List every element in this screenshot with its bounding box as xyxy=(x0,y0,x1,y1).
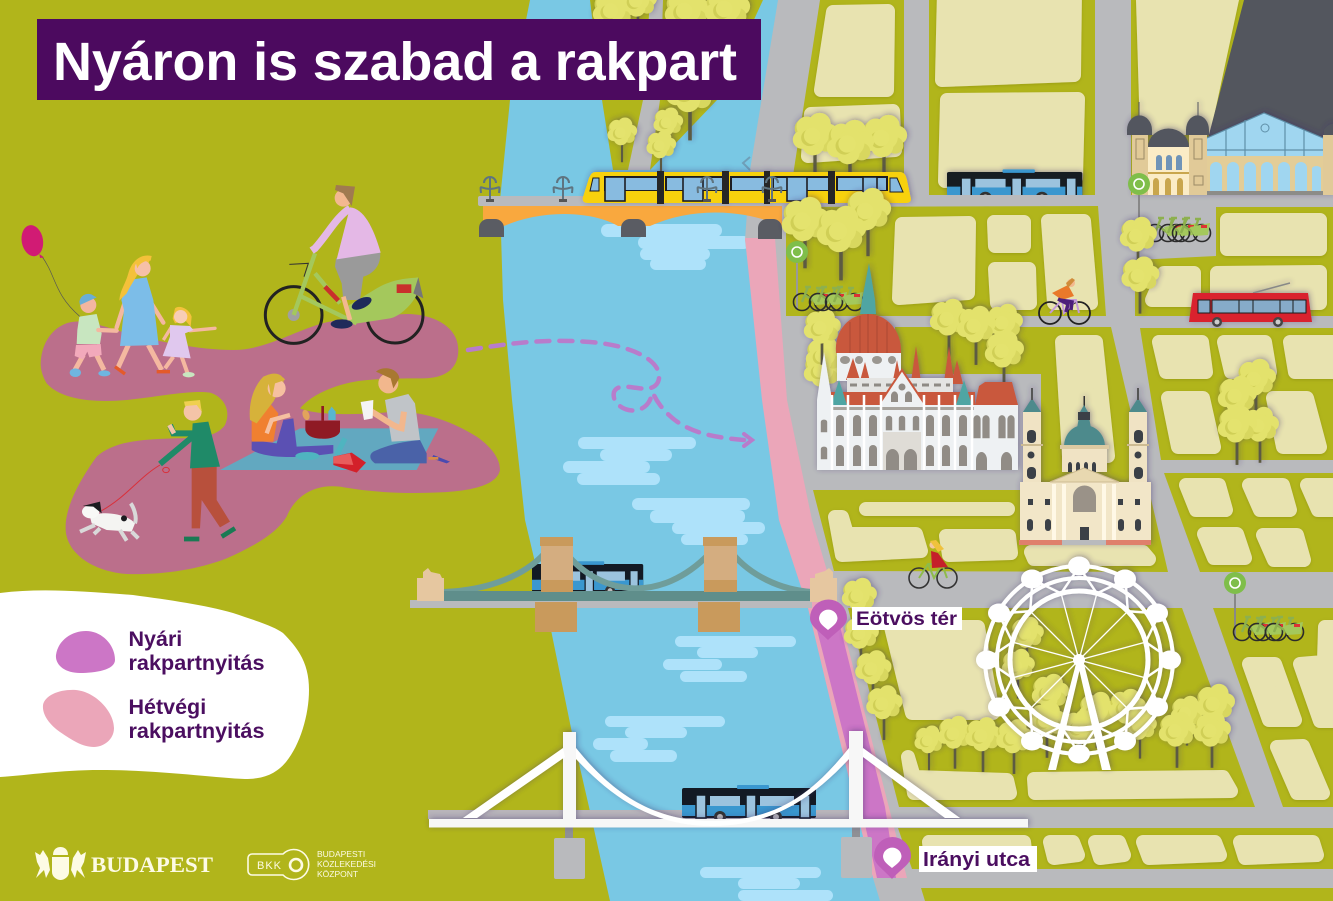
small cyclist with orange top xyxy=(1039,278,1090,324)
legend panel xyxy=(0,590,309,779)
dog walker and dog xyxy=(80,400,235,541)
water ripples xyxy=(563,224,833,901)
stone towers xyxy=(540,537,737,592)
station towers and centre xyxy=(1127,102,1333,195)
central arch xyxy=(1073,486,1096,512)
church body xyxy=(1020,482,1151,540)
bridge arches xyxy=(483,206,782,226)
title banner: Nyáron is szabad a rakpart xyxy=(53,32,737,92)
support legs xyxy=(1048,660,1111,770)
pilasters xyxy=(832,395,972,470)
lattice xyxy=(986,567,1172,753)
legend background xyxy=(0,590,309,779)
centre gable xyxy=(880,370,924,412)
main wall xyxy=(817,405,1018,470)
bridge piers xyxy=(479,219,782,239)
tier windows xyxy=(840,356,896,364)
right wing roof xyxy=(975,382,1018,405)
columns xyxy=(1054,484,1114,540)
key shape xyxy=(248,850,309,880)
picnic basket and food xyxy=(301,406,340,439)
white structure xyxy=(429,731,1028,828)
chevron marker on the embankment xyxy=(743,157,750,170)
Parliament building xyxy=(817,263,1018,470)
mother xyxy=(115,255,170,374)
gable windows xyxy=(891,384,912,402)
roof gallery xyxy=(847,378,953,393)
red book xyxy=(333,453,366,473)
panel: river Danube xyxy=(500,0,890,901)
legend label: weekend: rakpartnyitás xyxy=(128,719,265,743)
St Stephen's Basilica xyxy=(1019,388,1151,545)
cyclist with bike xyxy=(265,185,423,343)
label: Eötvös tér: Eötvös tér xyxy=(856,609,958,630)
pin marker xyxy=(874,837,911,879)
Ferris wheel xyxy=(976,556,1181,770)
side windows xyxy=(1027,499,1141,531)
bikes: Nyugati rack xyxy=(1146,218,1210,242)
station marker: Parliament xyxy=(786,241,808,310)
legend swatch: summer xyxy=(56,631,115,673)
legend swatch: weekend xyxy=(43,690,114,747)
trees behind buildings xyxy=(593,0,1279,465)
lion plinths xyxy=(417,568,837,602)
trolley poles xyxy=(1253,283,1290,293)
steps xyxy=(1062,540,1106,545)
teal roof turrets xyxy=(831,380,972,405)
station marker: Nyugati xyxy=(1128,173,1150,245)
Budapest logo xyxy=(35,847,213,880)
dark railway station yard xyxy=(1205,0,1333,150)
title banner xyxy=(37,19,761,100)
trolley body xyxy=(1189,293,1312,322)
blue bus on Bajcsy street xyxy=(947,169,1082,202)
BKK logo xyxy=(248,849,376,880)
pin: Eötvös tér xyxy=(810,600,847,640)
pink weekend embankment stretch xyxy=(745,238,907,878)
BKK full name: KÖZLEKEDÉSI xyxy=(317,859,376,869)
picnicking man xyxy=(361,368,450,463)
pin: Irányi utca xyxy=(874,837,911,879)
legend label: summer: Nyári xyxy=(128,627,182,651)
rims xyxy=(985,566,1173,754)
spire xyxy=(860,263,876,314)
label: Irányi utca: Irányi utca xyxy=(923,849,1031,871)
arrow head xyxy=(744,434,752,446)
dome tier xyxy=(837,353,901,381)
trees along the ring road xyxy=(1120,217,1159,314)
tram joints xyxy=(657,171,835,204)
trees near the tram xyxy=(782,188,891,280)
stone piers xyxy=(535,602,740,632)
red pinnacles xyxy=(846,346,963,385)
bridge deck xyxy=(478,196,793,206)
key ring xyxy=(290,859,302,871)
bus on bridge xyxy=(682,785,816,823)
pin marker xyxy=(810,600,847,640)
railway station building xyxy=(1127,102,1333,195)
bridge lamps xyxy=(481,177,572,202)
trees along the quay xyxy=(842,578,902,740)
arched windows xyxy=(821,415,1015,466)
girl xyxy=(163,307,215,377)
BKK full name: KÖZPONT xyxy=(317,869,358,879)
Chain bridge xyxy=(410,537,837,632)
left spire xyxy=(817,352,832,470)
pier stems xyxy=(565,827,860,838)
left tower xyxy=(1021,388,1043,484)
boy xyxy=(70,294,117,377)
pediment xyxy=(1050,468,1119,482)
bus behind bridge xyxy=(532,561,643,597)
BKK full name: BUDAPESTI xyxy=(317,849,365,859)
Margit bridge xyxy=(478,177,793,239)
legend label: summer: rakpartnyitás xyxy=(128,651,265,675)
hub xyxy=(1073,654,1085,666)
lower deck xyxy=(410,600,812,608)
bridge lamps in front of tram xyxy=(698,177,781,202)
legend label: weekend: Hétvégi xyxy=(128,695,206,719)
gable outline xyxy=(880,370,924,403)
pink base xyxy=(1019,540,1151,545)
door xyxy=(1080,527,1089,540)
yellow tram xyxy=(583,171,911,204)
concrete piers xyxy=(554,837,872,879)
olive city blocks xyxy=(786,0,1333,901)
dome xyxy=(836,314,901,353)
trolley wheels xyxy=(1212,317,1283,327)
portal xyxy=(883,432,921,470)
purple summer embankment stretch xyxy=(812,610,896,878)
illustrated people xyxy=(19,185,450,541)
picnic blanket xyxy=(220,428,438,470)
right tower xyxy=(1127,388,1149,484)
small cyclist in red dress xyxy=(909,540,957,588)
road cover below bus xyxy=(930,195,1094,206)
BKK letters: BKK xyxy=(257,860,282,872)
cream building plots xyxy=(808,0,1333,858)
dome ribs xyxy=(850,314,887,353)
red main roof xyxy=(831,392,975,405)
city crest xyxy=(35,847,86,880)
deck girder xyxy=(444,591,812,601)
park trees inside the wheel xyxy=(914,617,1235,774)
bikes: Parliament rack xyxy=(794,287,864,310)
city name: BUDAPEST xyxy=(91,852,213,877)
balloon with string xyxy=(19,223,96,345)
cabins xyxy=(976,556,1181,764)
suspension chains xyxy=(444,553,812,592)
bike stations xyxy=(786,173,1304,640)
red trolleybus xyxy=(1189,283,1312,327)
bikes: Oktogon rack xyxy=(1234,617,1304,640)
pin hole xyxy=(883,848,902,868)
tram body xyxy=(583,172,911,203)
trolley windows xyxy=(1198,300,1306,313)
glass hall xyxy=(1207,113,1323,195)
tram windows xyxy=(590,176,903,201)
Elisabeth bridge xyxy=(428,731,1028,879)
bridge roadway xyxy=(428,810,860,819)
portal doors xyxy=(886,449,1012,470)
spokes xyxy=(1012,593,1146,727)
mauve recreation blob xyxy=(41,314,500,574)
island with road xyxy=(590,0,763,170)
grey cornice xyxy=(831,407,974,410)
station marker: Oktogon xyxy=(1224,572,1246,640)
dashed route arrow xyxy=(468,341,752,446)
dome and drum xyxy=(1060,396,1109,472)
pin hole xyxy=(819,610,838,630)
embankment road surface xyxy=(745,0,1333,901)
picnicking woman xyxy=(250,374,345,460)
